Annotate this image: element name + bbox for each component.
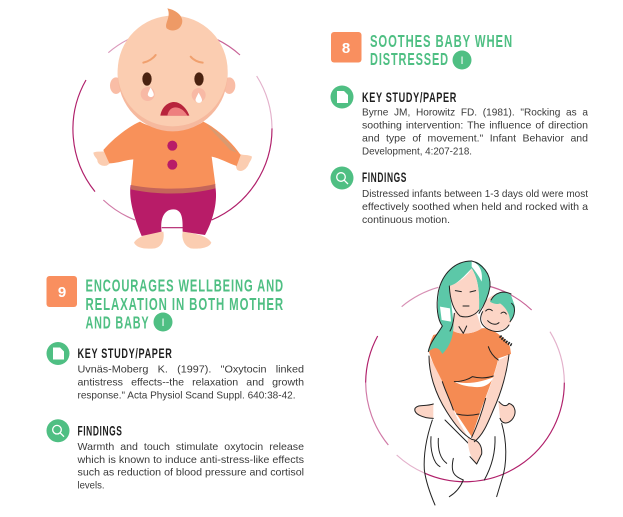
mother's hair, face and neck: [428, 261, 490, 354]
section 9 heading: [86, 276, 284, 332]
ring behind mother: [366, 286, 564, 482]
icon: document: [46, 342, 70, 365]
baby's arm and foot: [415, 402, 515, 423]
section 9 heading: I: [161, 317, 165, 329]
section 8 heading: [370, 31, 513, 70]
skirt: [424, 420, 506, 505]
findings text, section 9: Warmth and touch stimulate oxytocin release: [78, 442, 304, 453]
shirt buttons: [167, 141, 177, 170]
baby shirt: [103, 122, 241, 190]
ring behind baby: [73, 39, 272, 228]
icon: magnifier: [330, 166, 354, 190]
findings text, section 8: continuous motion.: [362, 215, 450, 226]
shirt lines: [454, 347, 498, 415]
illustration: crying baby: [73, 8, 272, 249]
key study text, section 8: and type of movement." Infant Behavior and: [362, 134, 588, 145]
key study text, section 8: soothing intervention: The influence of direction: [362, 121, 588, 132]
key study text, section 9: Uvnäs-Moberg K. (1997). "Oxytocin linked: [78, 365, 304, 376]
key study text, section 8: Byrne JM, Horowitz FD. (1981). "Rocking as a: [362, 108, 588, 119]
section 8 number badge: 8: [342, 40, 350, 57]
baby head: [110, 8, 235, 131]
icon: document: [330, 86, 354, 108]
key study text, section 8: [362, 108, 588, 158]
baby head: [481, 292, 515, 345]
findings heading, section 9: FINDINGS: [78, 422, 122, 438]
section 8 number badge: [331, 32, 362, 62]
findings text, section 8: Distressed infants between 1-3 days old were most: [362, 189, 588, 200]
mother's arms and hands: [429, 355, 509, 464]
section 8 heading: I: [460, 55, 464, 67]
findings text, section 9: levels.: [78, 480, 104, 491]
section 9 number badge: [46, 276, 77, 307]
illustration: mother carrying baby: [366, 261, 564, 505]
key study text, section 9: [78, 365, 304, 401]
findings text, section 9: which is known to induce anti-stress-like effects: [76, 455, 304, 466]
section 9 heading: RELAXATION IN BOTH MOTHER: [86, 294, 284, 314]
section 9 number badge: 9: [58, 284, 66, 301]
section 9 heading: AND BABY: [86, 312, 150, 332]
findings text, section 9: [76, 442, 304, 491]
key study text, section 9: response." Acta Physiol Scand Suppl. 640:38-42.: [78, 390, 296, 401]
findings text, section 8: effectively soothed when held and rocked with a: [362, 202, 588, 213]
baby hands: [93, 150, 252, 171]
section 8 heading: SOOTHES BABY WHEN: [370, 31, 513, 51]
key study text, section 8: Development, 4:207-218.: [362, 146, 472, 158]
findings text, section 8: [362, 189, 588, 226]
key study heading, section 8: KEY STUDY/PAPER: [362, 89, 457, 105]
findings heading, section 8: FINDINGS: [362, 169, 407, 185]
icon: magnifier: [46, 419, 70, 442]
baby legs and trousers: [130, 185, 216, 249]
section 9 heading: ENCOURAGES WELLBEING AND: [86, 276, 284, 296]
key study text, section 9: antistress effects--the relaxation and growth: [78, 378, 304, 389]
key study heading, section 9: KEY STUDY/PAPER: [78, 345, 172, 361]
shirt: [429, 328, 511, 437]
section 8 heading: DISTRESSED: [370, 49, 449, 69]
findings text, section 9: such as reduction of blood pressure and cortisol: [78, 468, 304, 479]
baby face: [141, 55, 206, 116]
